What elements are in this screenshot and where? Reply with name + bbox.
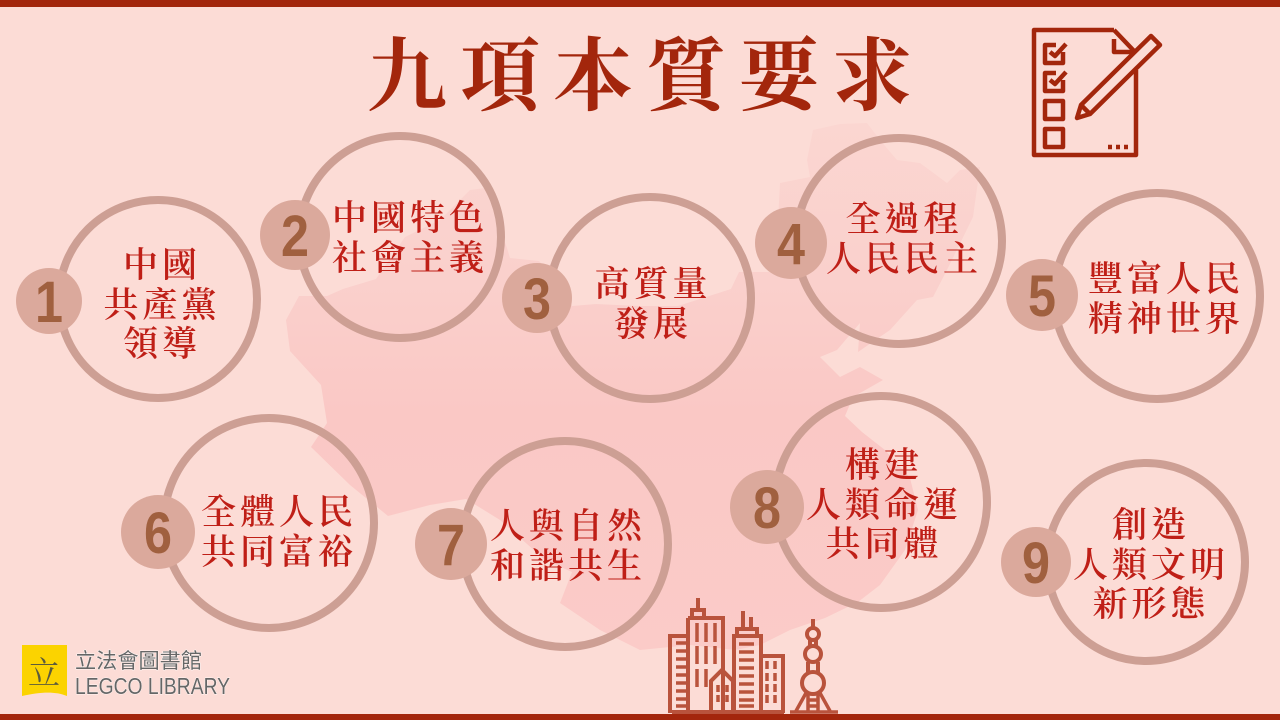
bottom border bar	[0, 714, 1280, 720]
item 3	[502, 197, 751, 399]
title: 九項本質要求	[367, 34, 925, 122]
item 8: 8	[753, 476, 781, 541]
logo wordmark	[75, 645, 230, 699]
item 7: 和諧共生	[490, 547, 646, 586]
logo: LegCo Library	[22, 645, 230, 699]
item 6: 共同富裕	[201, 533, 357, 572]
item 3: 高質量	[594, 265, 712, 304]
item 6: 6	[144, 501, 172, 566]
item 9: 創造	[1112, 506, 1190, 545]
item 1: 共產黨	[103, 286, 221, 325]
item 5: 精神世界	[1088, 300, 1244, 339]
item 2: 2	[281, 204, 309, 269]
item 4: 全過程	[845, 200, 963, 239]
item 3: 發展	[614, 305, 692, 344]
item 6	[121, 418, 374, 628]
item 8: 構建	[845, 446, 923, 485]
item 9: 人類文明	[1073, 546, 1229, 585]
item 5: 豐富人民	[1088, 260, 1244, 299]
item 7	[415, 441, 668, 647]
item 2	[260, 136, 501, 338]
item 1: 領導	[123, 325, 201, 364]
item 9: 新形態	[1092, 585, 1210, 624]
item 2: 中國特色	[332, 199, 488, 238]
map of China background	[286, 123, 980, 650]
item 1: 中國	[123, 246, 201, 285]
item 8: 人類命運	[806, 486, 962, 525]
item 4	[755, 138, 1002, 344]
item 2: 社會主義	[332, 239, 488, 278]
item 9	[1001, 463, 1245, 661]
icon: city skyline with tower	[670, 598, 838, 713]
item 8: 共同體	[825, 525, 943, 564]
logo wordmark: LEGCO LIBRARY	[75, 673, 230, 699]
item 5	[1006, 193, 1260, 399]
logo mark: yellow flag	[22, 645, 67, 696]
item 9: 9	[1022, 531, 1050, 596]
item 3: 3	[523, 267, 551, 332]
item 4: 4	[777, 212, 805, 277]
item 4: 人民民主	[826, 240, 982, 279]
item 5: 5	[1028, 264, 1056, 329]
item 7: 人與自然	[490, 507, 646, 546]
item 1: 1	[35, 270, 63, 335]
logo wordmark: 立法會圖書館	[75, 645, 202, 675]
item 7: 7	[437, 513, 465, 578]
logo mark: yellow flag: 立	[28, 655, 60, 691]
icon: checklist with pencil	[1034, 30, 1160, 155]
item 8	[730, 396, 987, 608]
item 1	[16, 200, 257, 398]
item 6: 全體人民	[201, 493, 357, 532]
top border bar	[0, 0, 1280, 7]
